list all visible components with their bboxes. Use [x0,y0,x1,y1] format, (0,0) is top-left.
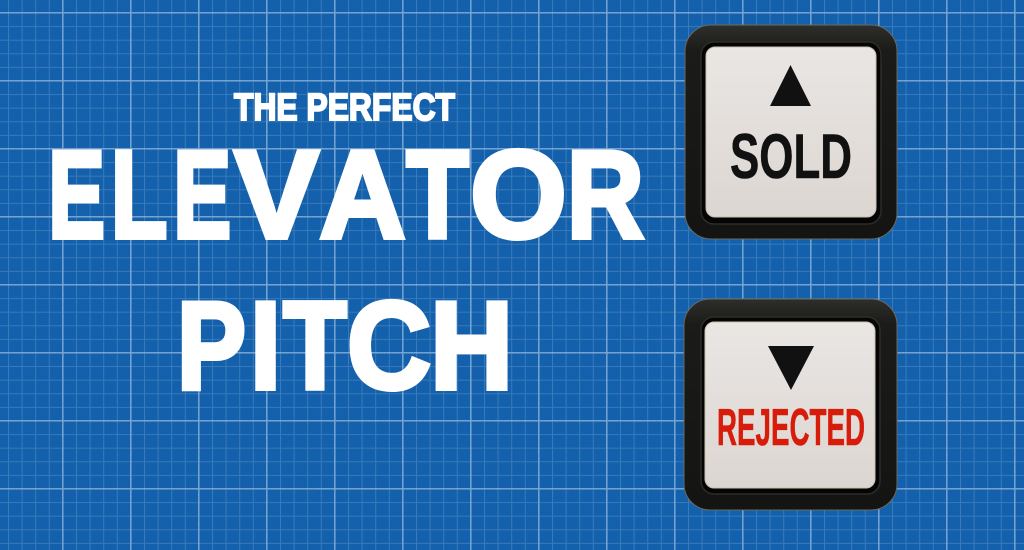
button: rejected [684,299,897,510]
icon: up arrow [770,65,811,106]
heading: pitch: T [283,278,347,416]
heading: elevator: R [567,126,644,264]
heading: elevator: O [470,126,567,264]
heading: elevator: L [111,126,168,264]
heading: the perfect: THE PERFECT [234,87,455,129]
heading: pitch: I [250,278,281,416]
heading: elevator: E [173,126,231,264]
heading: elevator: V [234,126,318,264]
label: rejected: REJECTED [717,399,865,457]
heading: elevator: T [406,126,469,264]
heading: elevator: A [320,126,406,264]
button: sold [685,25,897,239]
label: sold: SOLD [730,122,852,192]
heading: pitch: P [177,278,246,416]
heading: pitch: H [430,278,513,416]
heading: elevator: E [48,126,105,264]
icon: down arrow [768,346,814,390]
heading: pitch: C [347,278,431,416]
